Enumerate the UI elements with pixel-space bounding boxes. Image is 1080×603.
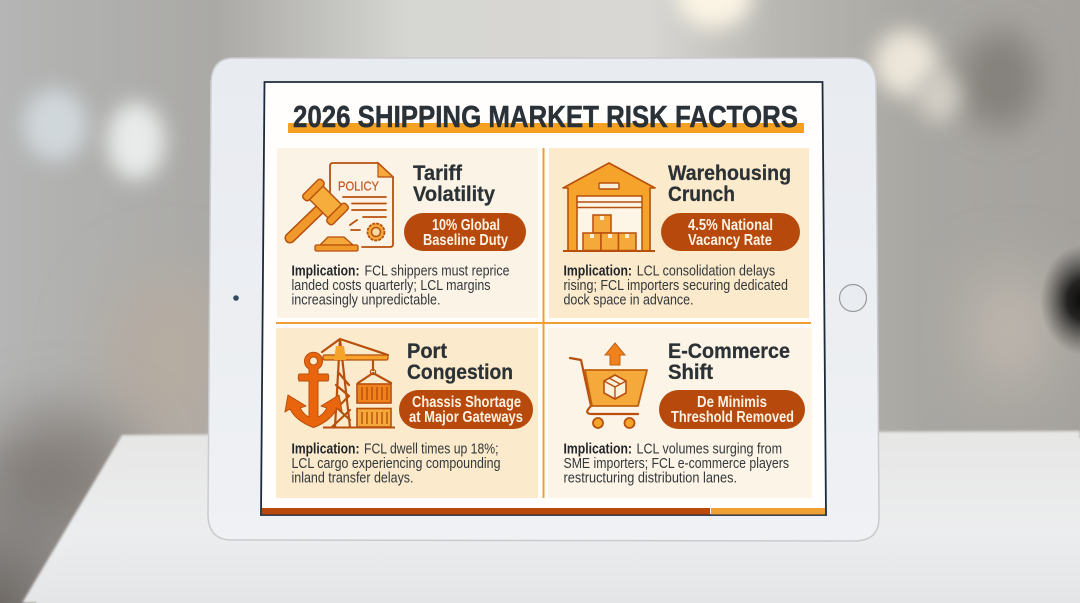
icon: anchor, crane and containers [285,339,395,428]
title highlight bar [288,123,804,133]
stat pill [404,213,526,251]
heading: Warehousing [668,161,791,185]
stat pill [399,390,533,429]
icon: gavel and policy document: POLICY [338,180,380,194]
implication text: inland transfer delays. [292,470,414,486]
implication text: restructuring distribution lanes. [564,470,737,486]
implication text [564,442,789,486]
title: 2026 SHIPPING MARKET RISK FACTORS [293,99,798,134]
stat pill: 10% Global [432,217,500,234]
stat pill: Vacancy Rate [688,232,772,249]
heading: Congestion [407,360,513,384]
icon: gavel and policy document [290,163,393,251]
implication text: LCL volumes surging from [636,442,782,458]
stat pill: Chassis Shortage [412,394,521,411]
implication text: LCL cargo experiencing compounding [292,456,500,472]
heading: Shift [668,360,713,384]
tablet body [208,58,879,541]
heading [413,161,495,206]
implication text: Implication: [564,264,632,280]
implication text: LCL consolidation delays [637,264,775,280]
tablet device [208,58,879,541]
implication text: SME importers; FCL e-commerce players [564,456,789,472]
stat pill: De Minimis [697,394,767,411]
stat pill: 4.5% National [688,217,773,234]
panel: warehousing crunch [549,148,809,318]
heading [668,161,791,206]
stat pill: Threshold Removed [671,409,794,426]
icon: shopping cart with parcel [570,343,647,428]
implication text: Implication: [292,442,360,458]
infographic screen [261,82,826,515]
panel: tariff volatility [277,148,538,318]
heading: Port [407,339,447,363]
implication text: FCL dwell times up 18%; [364,442,498,458]
camera dot [233,295,239,301]
stat pill [661,213,800,251]
stat pill: at Major Gateways [409,409,523,426]
implication text: Implication: [564,442,632,458]
implication text [564,264,788,308]
implication text: landed costs quarterly; LCL margins [292,278,490,294]
panel: port congestion [276,328,538,498]
heading [668,339,790,384]
implication text: rising; FCL importers securing dedicated [564,278,788,294]
heading: Crunch [668,182,735,206]
implication text [292,442,500,486]
implication text: FCL shippers must reprice [364,264,510,280]
stat pill: Baseline Duty [423,232,508,249]
implication text [292,264,510,308]
heading: Tariff [413,161,463,185]
heading: E-Commerce [668,339,790,363]
stat pill [659,390,805,429]
implication text: increasingly unpredictable. [292,292,440,308]
screen background [261,82,826,515]
panel: e-commerce shift [548,328,812,498]
implication text: Implication: [292,264,360,280]
icon: warehouse with boxes [563,163,655,251]
bottom accent bar [262,508,825,514]
implication text: dock space in advance. [564,292,694,308]
home button [840,284,866,312]
heading: Volatility [413,182,495,206]
heading [407,339,513,384]
white table top [22,431,1080,603]
